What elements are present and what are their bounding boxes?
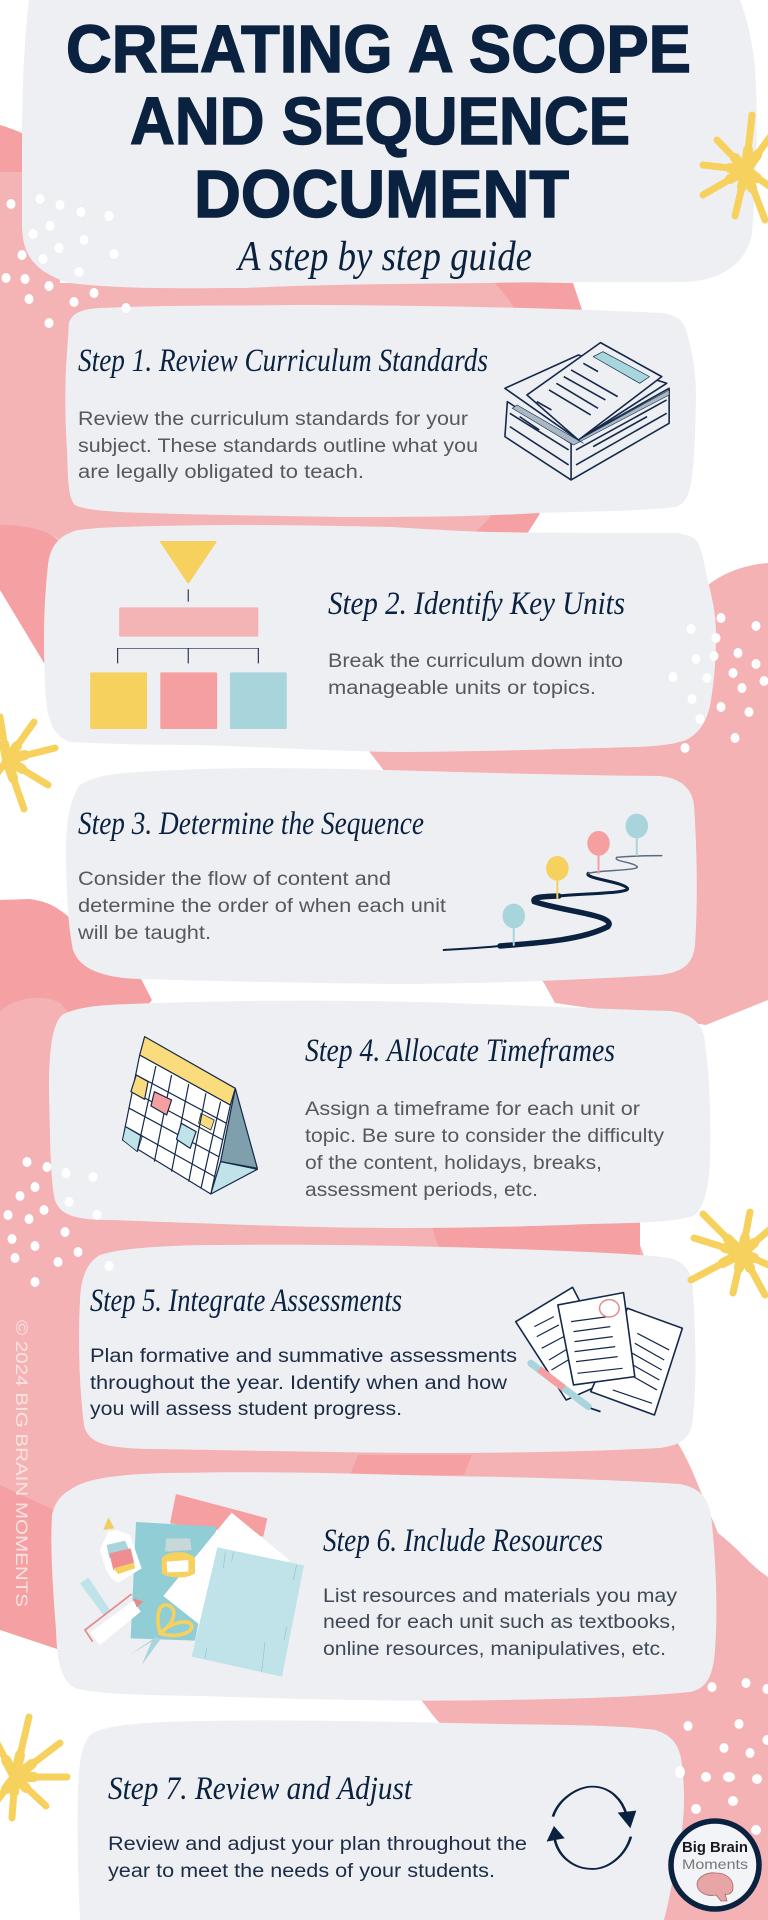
panel: title bbox=[22, 0, 757, 288]
step 6 text: online resources, manipulatives, etc. bbox=[323, 1639, 666, 1660]
panel: step 2 bbox=[44, 525, 716, 752]
logo: Big Brain Moments: Moments bbox=[682, 1856, 748, 1872]
panel: step 3 bbox=[66, 768, 697, 984]
star: top right bbox=[703, 115, 768, 220]
subtitle: A step by step guide bbox=[235, 234, 532, 280]
step 4 text: assessment periods, etc. bbox=[305, 1180, 538, 1201]
step 3 text: determine the order of when each unit bbox=[78, 896, 447, 917]
step 3 text bbox=[77, 869, 447, 944]
step 3 text: will be taught. bbox=[77, 923, 211, 944]
copyright vertical text: © 2024 BIG BRAIN MOMENTS bbox=[12, 1320, 31, 1607]
step 6 text: need for each unit such as textbooks, bbox=[323, 1612, 676, 1633]
icon: desk calendar bbox=[123, 1037, 257, 1194]
step 5 heading: Step 5. Integrate Assessments bbox=[90, 1283, 402, 1319]
step 2 heading: Step 2. Identify Key Units bbox=[328, 586, 625, 622]
step 3 text: Consider the flow of content and bbox=[78, 869, 391, 890]
step 7 text bbox=[108, 1834, 527, 1882]
panel: step 5 bbox=[79, 1245, 696, 1453]
star: left lower bbox=[0, 1717, 67, 1818]
title bbox=[66, 12, 691, 232]
title: AND SEQUENCE bbox=[130, 84, 630, 159]
step 1 text: subject. These standards outline what you bbox=[78, 436, 478, 457]
logo: Big Brain Moments: Big Brain bbox=[682, 1840, 748, 1856]
step 4 heading: Step 4. Allocate Timeframes bbox=[305, 1033, 615, 1069]
step 1 text: Review the curriculum standards for your bbox=[78, 409, 469, 430]
step 3 heading: Step 3. Determine the Sequence bbox=[78, 806, 424, 842]
step 7 text: Review and adjust your plan throughout the bbox=[108, 1834, 527, 1855]
logo: Big Brain Moments bbox=[671, 1821, 759, 1909]
icon: brain bbox=[697, 1873, 733, 1901]
step 6 text: List resources and materials you may bbox=[323, 1586, 678, 1607]
icon: winding road with pins bbox=[444, 814, 662, 950]
step 5 text bbox=[90, 1346, 517, 1420]
step 6 text bbox=[323, 1586, 678, 1660]
step 7 heading: Step 7. Review and Adjust bbox=[108, 1771, 413, 1807]
step 1 text: are legally obligated to teach. bbox=[78, 462, 364, 483]
step 5 text: throughout the year. Identify when and how bbox=[90, 1373, 507, 1394]
panel: step 1 bbox=[65, 305, 696, 517]
step 5 text: Plan formative and summative assessments bbox=[90, 1346, 517, 1367]
step 7 text: year to meet the needs of your students. bbox=[108, 1861, 495, 1882]
title: DOCUMENT bbox=[194, 157, 569, 232]
title: CREATING A SCOPE bbox=[66, 12, 691, 87]
icon: stack of papers bbox=[505, 343, 669, 480]
step 2 text: Break the curriculum down into bbox=[328, 651, 623, 672]
step 4 text: topic. Be sure to consider the difficulty bbox=[305, 1126, 665, 1147]
star: left upper bbox=[0, 717, 55, 809]
icon: graded papers and pen bbox=[516, 1287, 682, 1415]
step 4 text bbox=[305, 1099, 665, 1201]
step 6 heading: Step 6. Include Resources bbox=[323, 1523, 603, 1559]
step 1 text bbox=[78, 409, 478, 483]
icon: review cycle arrows bbox=[547, 1787, 636, 1869]
step 2 text: manageable units or topics. bbox=[328, 678, 596, 699]
icon: unit hierarchy bbox=[90, 542, 287, 729]
step 4 text: Assign a timeframe for each unit or bbox=[305, 1099, 641, 1120]
star: right middle bbox=[691, 1212, 768, 1295]
panel: step 7 bbox=[78, 1720, 684, 1920]
panel: step 4 bbox=[49, 1001, 710, 1228]
step 2 text bbox=[328, 651, 623, 699]
icon: craft supplies bbox=[80, 1494, 304, 1677]
step 1 heading: Step 1. Review Curriculum Standards bbox=[78, 343, 488, 379]
step 4 text: of the content, holidays, breaks, bbox=[305, 1153, 602, 1174]
panel: step 6 bbox=[51, 1472, 716, 1701]
step 5 text: you will assess student progress. bbox=[90, 1399, 402, 1420]
